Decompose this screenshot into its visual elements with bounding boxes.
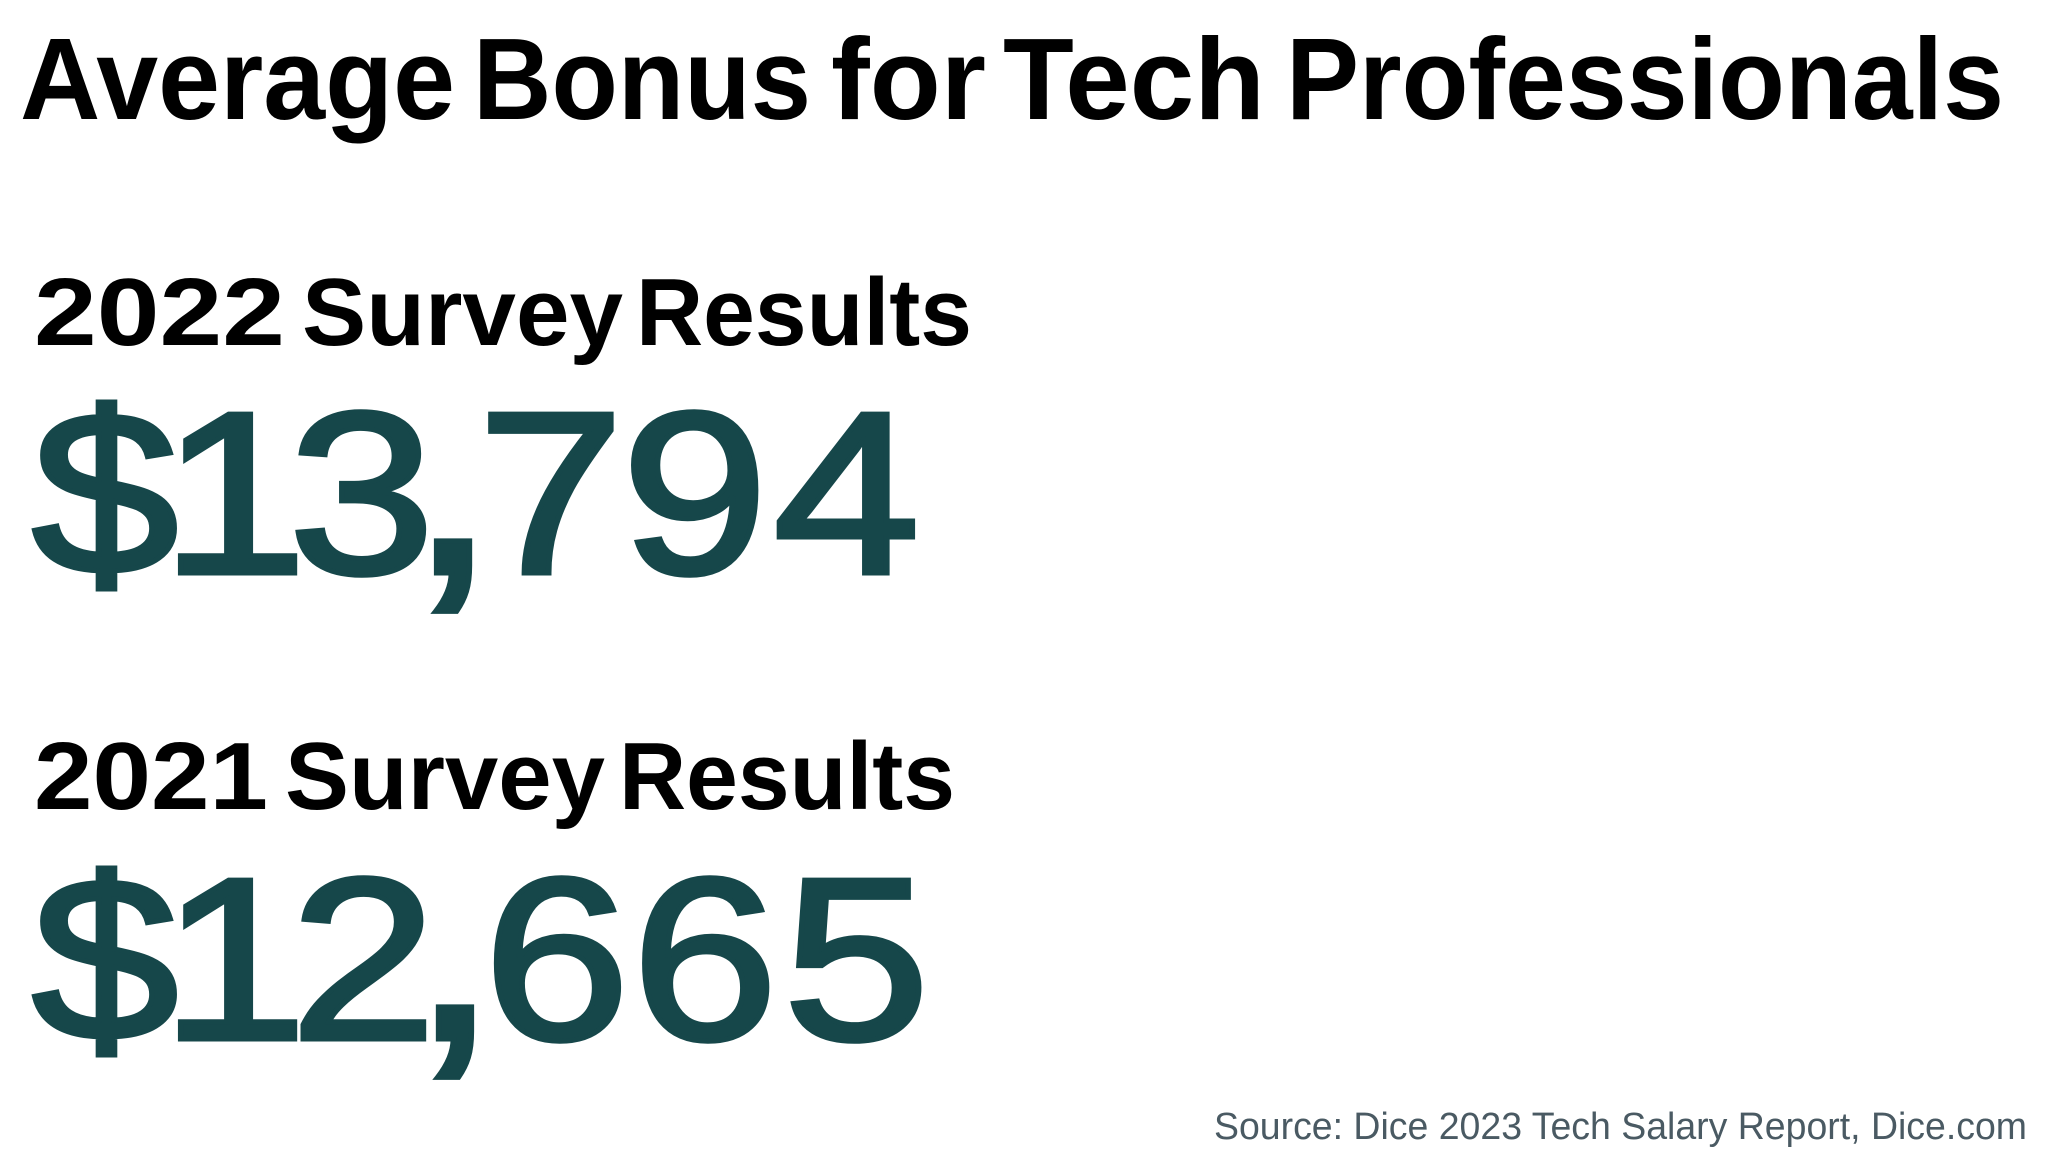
heading: 2022 survey results: 2022 (34, 259, 285, 366)
heading: 2022 survey results (34, 259, 972, 366)
big number: 2022 bonus: , (405, 303, 500, 637)
big number: 2021 bonus: 665 (483, 831, 930, 1088)
title: Average (20, 14, 455, 144)
big number: 2022 bonus: 794 (478, 365, 920, 622)
title: Professionals (1286, 14, 2004, 144)
title (20, 14, 2004, 144)
heading: 2021 survey results: Survey (285, 723, 605, 830)
heading: 2021 survey results: Results (619, 723, 955, 830)
title: for (831, 14, 986, 144)
big number: 2021 bonus: $12 (32, 831, 437, 1088)
heading: 2021 survey results: 2021 (34, 723, 268, 830)
title: Tech (1003, 14, 1265, 144)
heading: 2022 survey results: Results (636, 259, 972, 366)
big number: 2022 bonus: $13 (32, 365, 435, 622)
source note: Source: Dice 2023 Tech Salary Report, Dice.com (1214, 1106, 2027, 1148)
title: Bonus (473, 14, 811, 144)
heading: 2021 survey results (34, 723, 955, 830)
heading: 2022 survey results: Survey (302, 259, 623, 366)
big number: 2021 bonus: , (407, 769, 502, 1103)
